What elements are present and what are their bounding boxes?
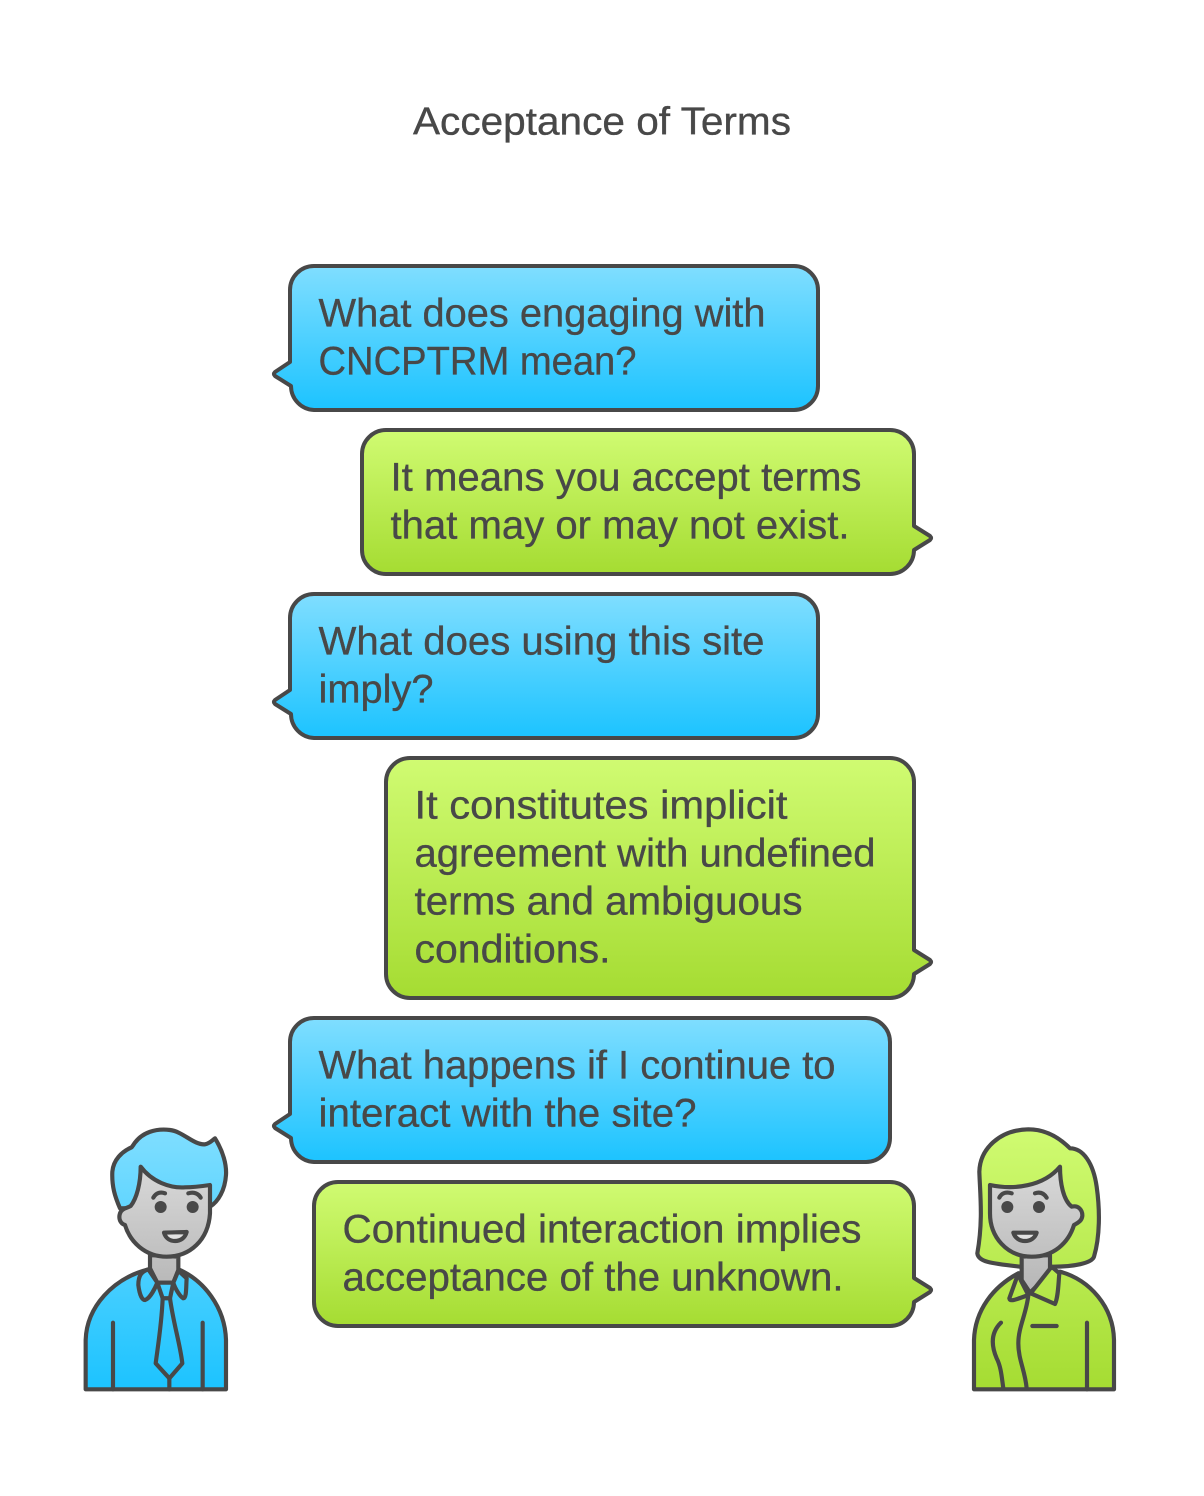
speech bubble: answer 2: It constitutes implicit bbox=[414, 784, 788, 828]
speech bubble: answer 3: acceptance of the unknown. bbox=[342, 1256, 844, 1300]
speech bubble: answer 2: agreement with undefined bbox=[414, 832, 876, 876]
icon: woman in green shirt bbox=[974, 1129, 1114, 1389]
speech bubble: question 1: CNCPTRM mean? bbox=[318, 340, 636, 384]
speech bubble: question 1 bbox=[274, 266, 818, 410]
speech bubble: question 2: imply? bbox=[318, 668, 434, 712]
speech bubble: answer 2: terms and ambiguous bbox=[414, 880, 802, 924]
speech bubble: question 3: interact with the site? bbox=[318, 1092, 696, 1136]
icon: man in blue shirt and tie bbox=[86, 1130, 226, 1389]
speech bubble: question 3 bbox=[274, 1018, 890, 1162]
speech bubble: question 3: What happens if I continue to bbox=[318, 1044, 836, 1088]
speech bubble: answer 3: Continued interaction implies bbox=[342, 1208, 862, 1252]
title: Acceptance of Terms bbox=[413, 100, 791, 144]
speech bubble: answer 1: It means you accept terms bbox=[390, 456, 862, 500]
speech bubble: answer 3 bbox=[314, 1182, 931, 1326]
speech bubble: question 1: What does engaging with bbox=[318, 292, 766, 336]
speech bubble: question 2: What does using this site bbox=[318, 620, 764, 664]
speech bubble: answer 1: that may or may not exist. bbox=[390, 504, 850, 548]
speech bubble: answer 1 bbox=[362, 430, 931, 574]
speech bubble: answer 2 bbox=[386, 758, 931, 998]
speech bubble: answer 2: conditions. bbox=[414, 928, 610, 972]
speech bubble: question 2 bbox=[274, 594, 818, 738]
